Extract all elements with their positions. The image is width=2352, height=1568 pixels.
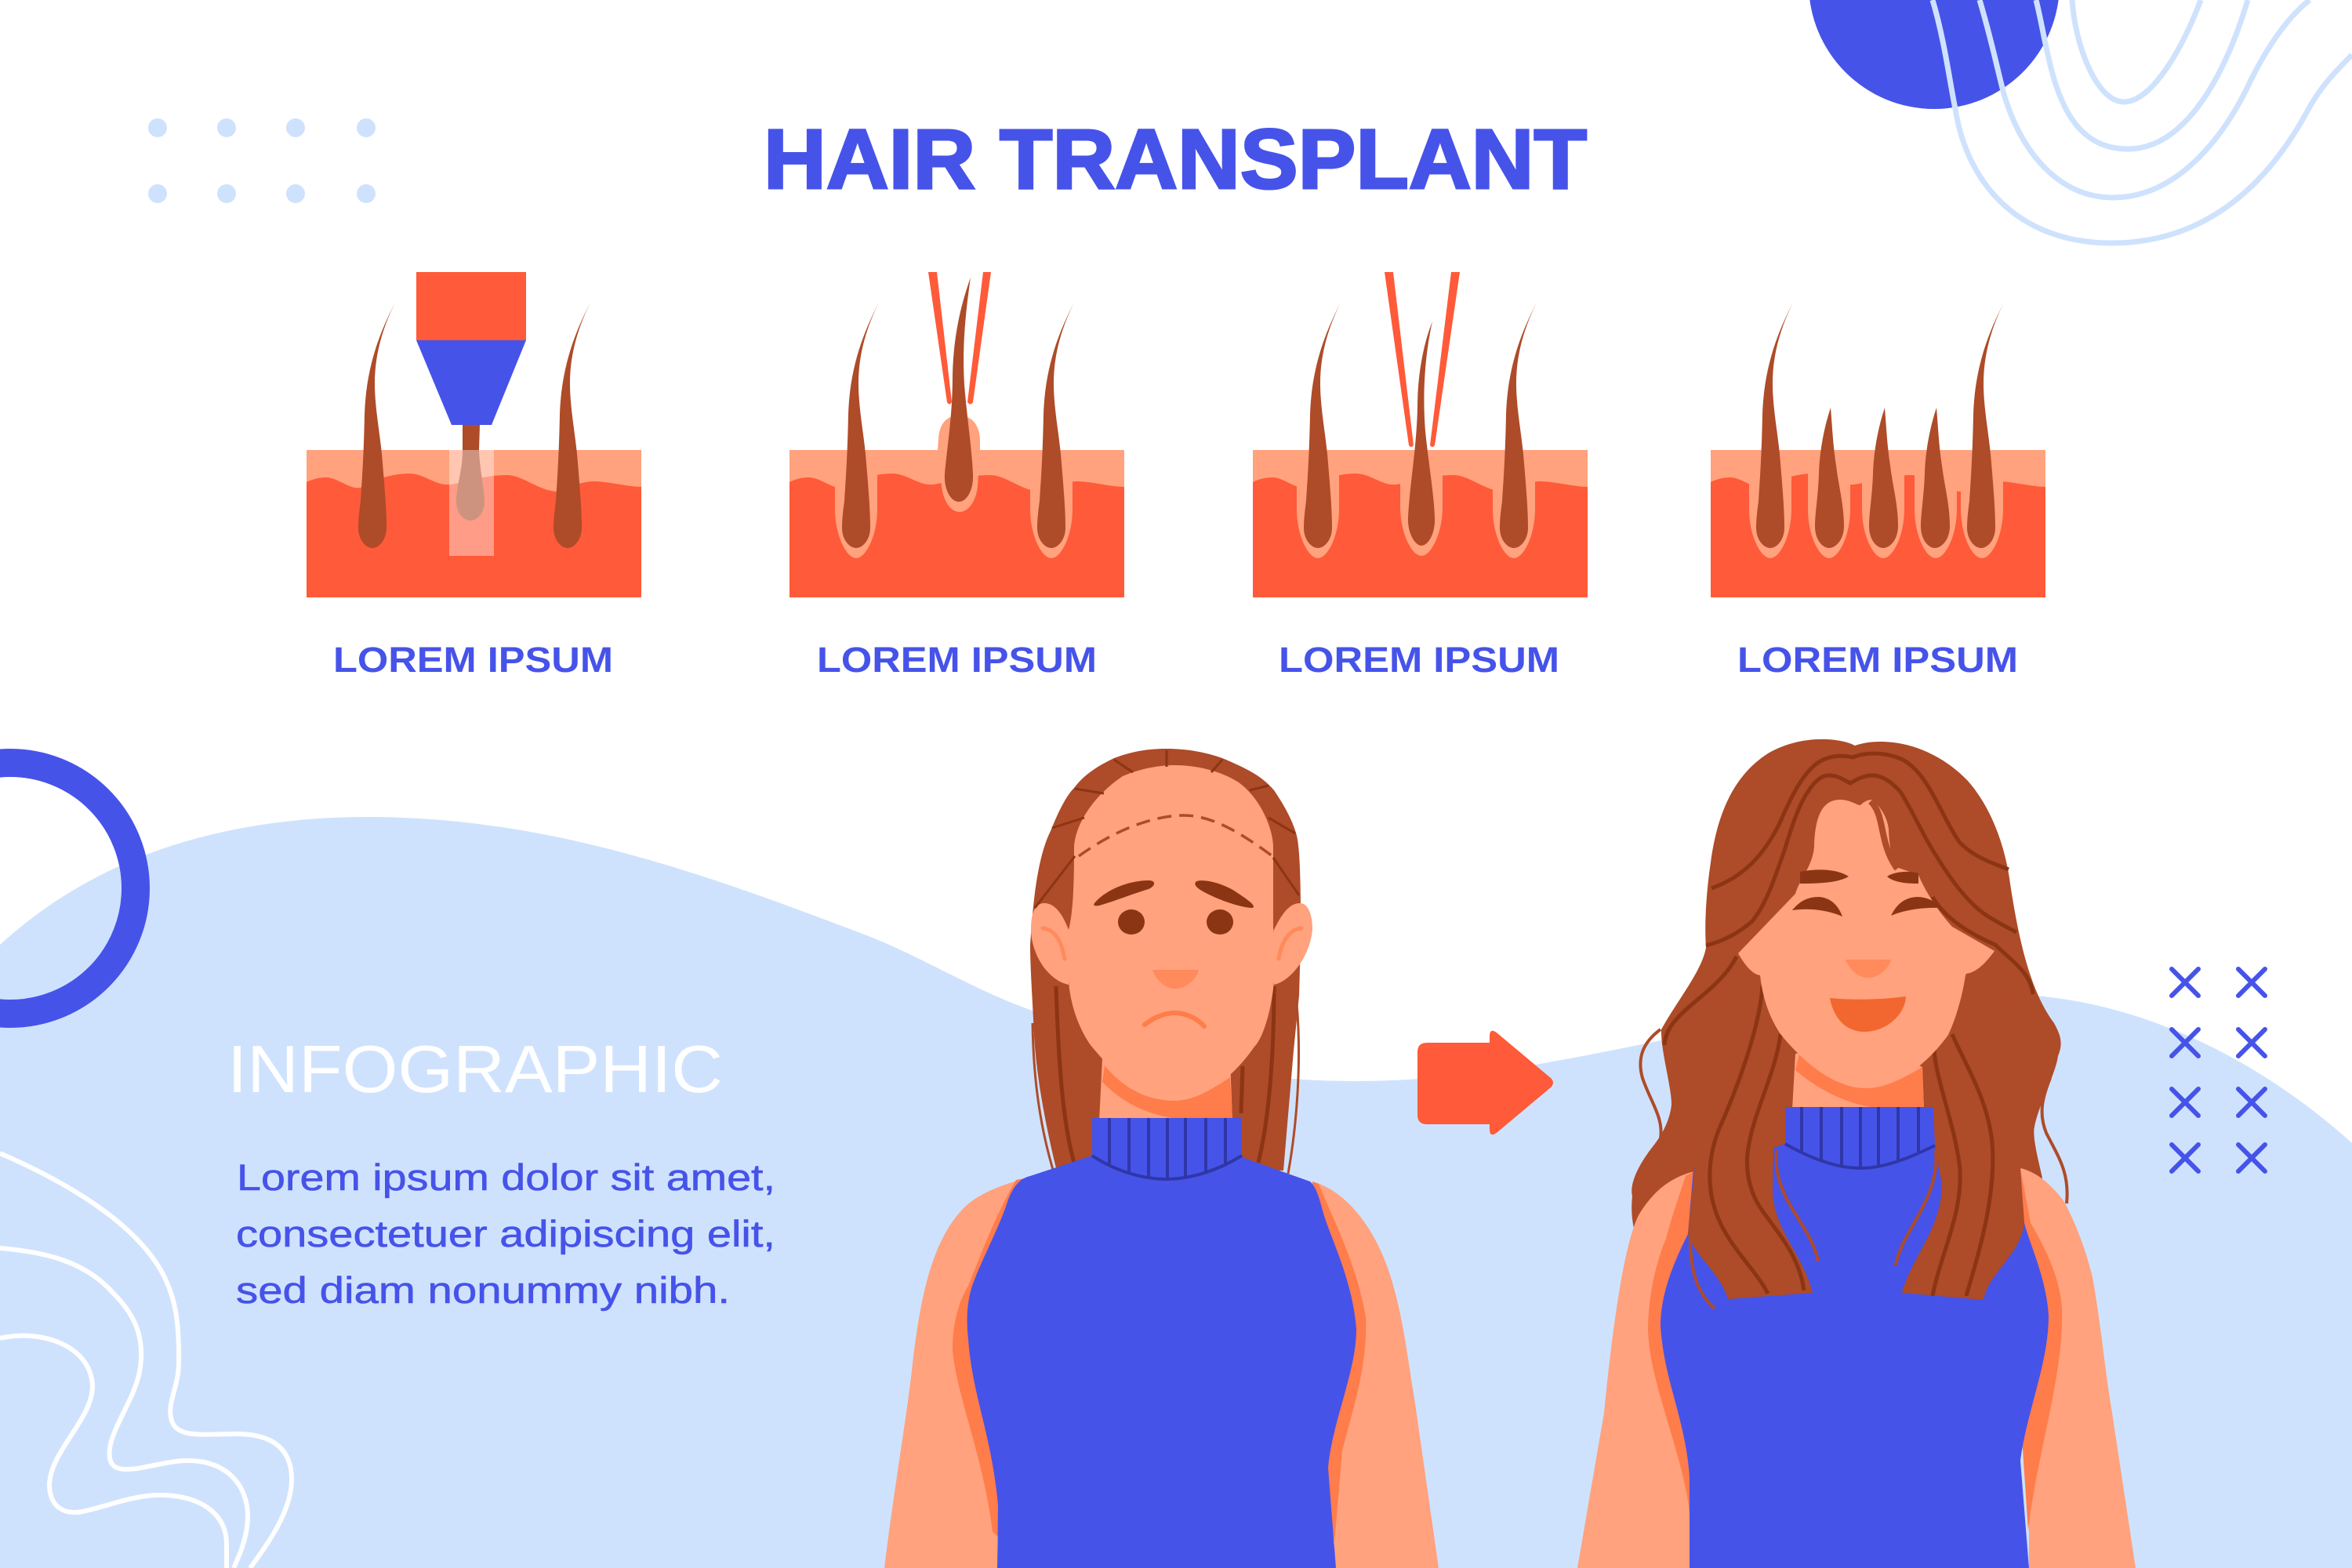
decorative white curves bottom left bbox=[0, 1153, 292, 1568]
left arm bbox=[1577, 1171, 1705, 1568]
text block: Lorem ipsum dolor sit amet, bbox=[237, 1156, 775, 1198]
sad mouth bbox=[1145, 1013, 1204, 1026]
hair sheaths bbox=[1297, 467, 1535, 558]
ears bbox=[1031, 903, 1312, 985]
sweater torso bbox=[1661, 1144, 2049, 1568]
skin block bbox=[1253, 450, 1588, 597]
text block: consectetuer adipiscing elit, bbox=[236, 1213, 775, 1254]
step label: LOREM IPSUM bbox=[1279, 640, 1559, 680]
front hair right bbox=[1902, 972, 2042, 1300]
panel: step 1 extraction bbox=[307, 272, 641, 680]
front hair left bbox=[1686, 972, 1813, 1299]
hairs bbox=[1304, 303, 1537, 548]
planned hairline bbox=[1079, 815, 1272, 856]
neck shadow bbox=[1102, 1065, 1232, 1118]
hair sheaths bbox=[835, 416, 1073, 558]
bald head bbox=[1069, 765, 1276, 1101]
step label: LOREM IPSUM bbox=[817, 640, 1097, 680]
neck shadow bbox=[1795, 1054, 1924, 1107]
panel: step 3 implanting bbox=[1253, 272, 1588, 680]
eyebrows bbox=[1094, 880, 1254, 908]
right arm bbox=[1312, 1181, 1439, 1568]
hair follicles bbox=[358, 303, 590, 548]
ear details bbox=[1043, 928, 1301, 959]
tweezers bbox=[928, 272, 991, 405]
tweezers bbox=[1385, 272, 1460, 447]
hair sheaths bbox=[1749, 470, 2003, 558]
step label: LOREM IPSUM bbox=[1737, 640, 2018, 680]
face bbox=[1738, 800, 1994, 1088]
skin block bbox=[307, 450, 641, 597]
person after: full hair bbox=[1577, 739, 2136, 1568]
eyebrows bbox=[1800, 869, 1918, 884]
nose bbox=[1846, 960, 1891, 978]
hair strands bbox=[1056, 986, 1274, 1163]
person before: balding bbox=[884, 749, 1439, 1568]
hair strands bbox=[1664, 753, 2033, 1296]
nose bbox=[1152, 970, 1199, 989]
scalp hair lines bbox=[1035, 750, 1299, 908]
neck bbox=[1099, 1058, 1232, 1121]
stray strands bbox=[1033, 1004, 1299, 1187]
smiling mouth bbox=[1830, 996, 1906, 1032]
thin hair wisps bbox=[1690, 1150, 1936, 1308]
panel: step 4 result bbox=[1711, 303, 2045, 680]
turtleneck collar bbox=[1092, 1118, 1242, 1179]
eyes bbox=[1118, 909, 1233, 935]
background blob bbox=[0, 817, 2352, 1568]
skin block bbox=[789, 450, 1124, 597]
stray outer strands bbox=[1640, 1029, 2067, 1203]
neck bbox=[1792, 1043, 1924, 1109]
left arm bbox=[884, 1178, 1029, 1568]
extracted hair bbox=[456, 425, 485, 521]
decorative x marks bbox=[2172, 969, 2265, 1171]
decorative dots bbox=[148, 118, 376, 203]
back hair bbox=[1030, 749, 1301, 1171]
sweater torso bbox=[967, 1156, 1356, 1568]
extraction channel bbox=[449, 450, 494, 556]
panel: step 2 pulling bbox=[789, 272, 1124, 680]
text block bbox=[236, 1156, 775, 1311]
title: HAIR TRANSPLANT bbox=[764, 111, 1587, 206]
hairs bbox=[1756, 303, 2004, 548]
decorative ring bbox=[0, 763, 136, 1014]
skin block bbox=[1711, 450, 2045, 597]
decorative curves top right bbox=[1933, 0, 2352, 243]
arm shadows bbox=[953, 1178, 1366, 1543]
arrow bbox=[1417, 1031, 1553, 1134]
infographic heading: INFOGRAPHIC bbox=[227, 1033, 723, 1107]
arm shadows bbox=[1648, 1168, 2062, 1531]
closed smiling eyes bbox=[1792, 897, 1940, 916]
turtleneck collar bbox=[1785, 1107, 1935, 1168]
hair lock over forehead bbox=[1871, 801, 1897, 869]
hairs bbox=[842, 278, 1074, 548]
back hair bbox=[1632, 739, 2061, 1235]
extraction tool bbox=[416, 272, 526, 425]
right arm bbox=[2020, 1168, 2136, 1568]
decorative circle top right bbox=[1809, 0, 2060, 109]
text block: sed diam nonummy nibh. bbox=[236, 1269, 730, 1311]
step label: LOREM IPSUM bbox=[333, 640, 613, 680]
